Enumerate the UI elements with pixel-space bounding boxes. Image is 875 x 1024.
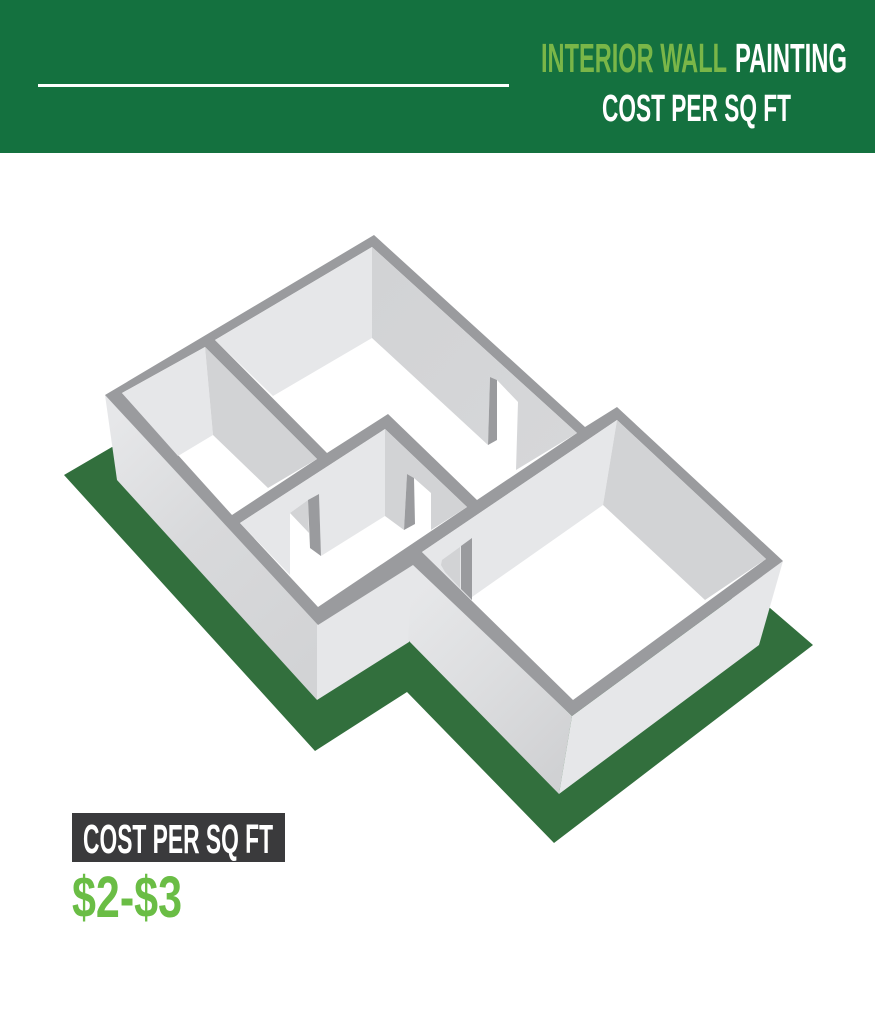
floor plan illustration: [64, 235, 813, 843]
room: large back: [215, 247, 577, 500]
room: centre: [240, 429, 467, 607]
cost label badge: [72, 813, 285, 862]
door jamb: [488, 377, 497, 445]
room: left: [122, 347, 317, 515]
cost value: $2-$3: [72, 865, 182, 930]
green ground: [64, 447, 813, 843]
exterior wall: left: [105, 395, 320, 700]
door jamb: [461, 538, 472, 600]
wall tops: [105, 235, 783, 716]
door jamb right: [404, 474, 415, 530]
door recess: [441, 547, 460, 588]
door jamb left: [308, 494, 321, 556]
exterior wall: lower right of right room: [559, 561, 783, 794]
exterior wall: centre front: [317, 562, 416, 700]
header rule: [38, 84, 509, 87]
door recess: [290, 500, 309, 533]
header banner: [0, 0, 875, 153]
title line 1: INTERIOR WALL: [541, 35, 727, 81]
cost label badge: COST PER SQ FT: [83, 816, 273, 862]
exterior wall: lower left of right room: [408, 562, 572, 794]
room: right: [422, 420, 766, 700]
